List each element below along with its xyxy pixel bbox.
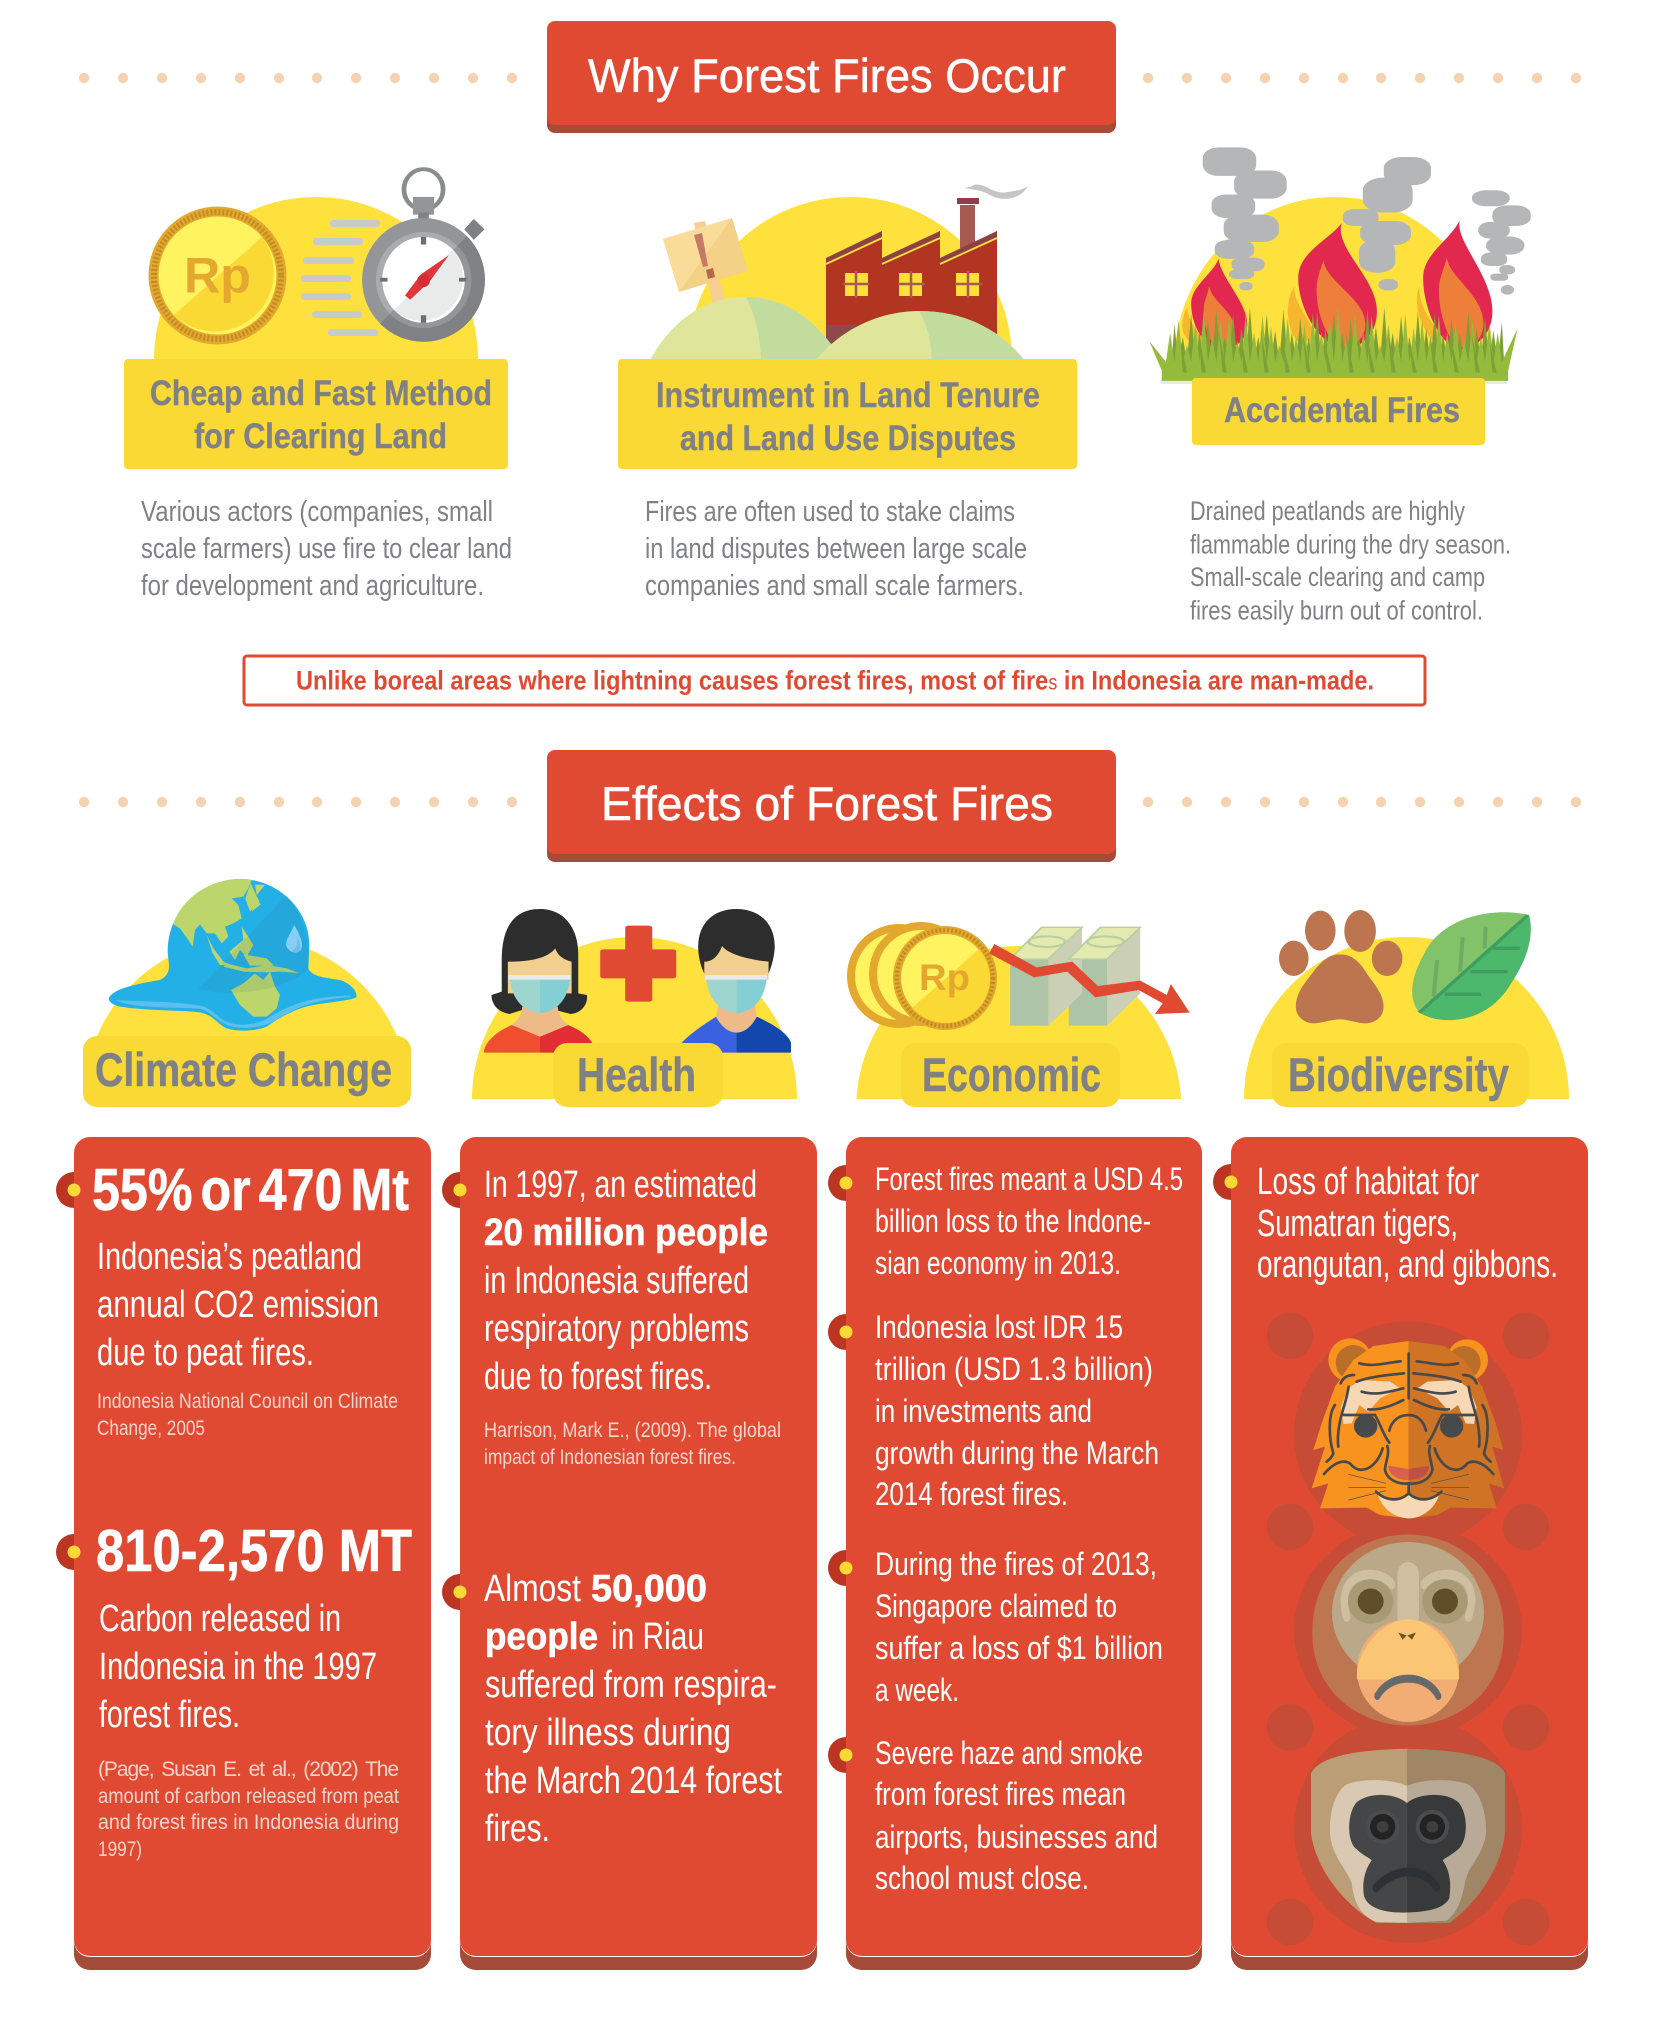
- source note: Harrison: impact of Indonesian forest fires.: [484, 1446, 736, 1469]
- text block: 20 million people: due to forest fires.: [484, 1356, 712, 1398]
- text block: peatland emission: Indonesia’s peatland: [97, 1236, 362, 1278]
- text block: carbon released: Carbon released in: [99, 1598, 341, 1640]
- heading: accidental fires: Accidental Fires: [1224, 391, 1460, 430]
- text block: accidental fires description: flammable during the dry season.: [1190, 530, 1511, 560]
- source note: Harrison: [484, 1419, 781, 1469]
- source note: Page et al.: [98, 1758, 399, 1861]
- heading: instrument in land tenure: Instrument in Land Tenure: [656, 376, 1040, 415]
- icon: paw and leaf: [1279, 910, 1531, 1023]
- text block: haze and smoke closures: Severe haze and smoke: [875, 1735, 1143, 1771]
- text block: Singapore loss: During the fires of 2013,: [875, 1546, 1157, 1582]
- heading: cheap and fast method: [150, 374, 492, 456]
- heading: health: Health: [577, 1048, 696, 1101]
- text block: IDR 15 trillion: [875, 1309, 1159, 1512]
- source note: Page et al.: and forest fires in Indonesia during: [98, 1811, 399, 1834]
- panel: economic facts: [828, 1137, 1202, 1970]
- text block: carbon released: [99, 1598, 377, 1736]
- icon: orangutan face: [1312, 1534, 1504, 1726]
- coin label: Rp: [184, 248, 251, 304]
- text block: IDR 15 trillion: in investments and: [875, 1393, 1092, 1429]
- icon: man with mask: [682, 909, 791, 1053]
- source note: Page et al.: 1997): [98, 1838, 142, 1861]
- icon: orangutan and gibbon faces: [1311, 1534, 1505, 1923]
- text block: Singapore loss: a week.: [875, 1672, 959, 1708]
- heading: instrument in land tenure: [656, 376, 1040, 458]
- section header: Why Forest Fires Occur: [79, 21, 1581, 133]
- text block: cheap and fast description: Various actors (companies, small: [141, 496, 493, 528]
- text block: accidental fires description: Small-scale clearing and camp: [1190, 562, 1485, 592]
- title: Why Forest Fires Occur: Why Forest Fires Occur: [588, 49, 1066, 102]
- text block: IDR 15 trillion: Indonesia lost IDR 15: [875, 1309, 1123, 1345]
- text block: haze and smoke closures: [875, 1735, 1158, 1896]
- text block: land tenure description: companies and small scale farmers.: [645, 570, 1024, 602]
- icon: stopwatch: [362, 169, 485, 342]
- text block: Singapore loss: Singapore claimed to: [875, 1588, 1117, 1624]
- text block: loss of habitat: Sumatran tigers,: [1257, 1203, 1458, 1245]
- panel: health facts: [442, 1137, 817, 1970]
- icon: smoke: [1203, 147, 1531, 295]
- text block: Singapore loss: suffer a loss of $1 billion: [875, 1630, 1163, 1666]
- source note: national council: Indonesia National Council on Climate: [97, 1390, 398, 1413]
- heading: climate change: Climate Change: [95, 1043, 392, 1096]
- arrow: falling trend: [989, 944, 1190, 1014]
- text block: 20 million people: in Indonesia suffered: [484, 1260, 749, 1302]
- text block: IDR 15 trillion: 2014 forest fires.: [875, 1476, 1068, 1512]
- text block: 50,000 people in Riau: tory illness during: [485, 1712, 731, 1754]
- source note: Harrison: Harrison, Mark E., (2009). The global: [484, 1419, 781, 1442]
- text block: 50,000 people in Riau: Almost: [484, 1568, 581, 1610]
- text block: 50,000 people in Riau: fires.: [485, 1808, 550, 1850]
- icon: medical cross: [600, 926, 676, 1002]
- text block: peatland emission: due to peat fires.: [97, 1332, 314, 1374]
- text block: haze and smoke closures: from forest fires mean: [875, 1776, 1126, 1812]
- icon: flames, smoke and grass: [1149, 147, 1531, 384]
- icon: woman with mask: [484, 909, 592, 1053]
- icon: speed lines: [301, 220, 380, 336]
- icon: grass: [1149, 307, 1518, 384]
- heading: cheap and fast method: Cheap and Fast Method: [150, 374, 492, 413]
- text block: 20 million people: 20 million people: [484, 1212, 768, 1254]
- heading: economic: Economic: [922, 1048, 1101, 1101]
- text block: loss of habitat: Loss of habitat for: [1257, 1161, 1479, 1203]
- text block: IDR 15 trillion: trillion (USD 1.3 billion): [875, 1351, 1153, 1387]
- icon: rupiah coin: [148, 206, 286, 344]
- icon: melting globe: [109, 879, 357, 1031]
- text block: IDR 15 trillion: growth during the March: [875, 1435, 1159, 1471]
- icon: gibbon face: [1311, 1749, 1505, 1923]
- text block: 50,000 people in Riau: people: [485, 1616, 598, 1658]
- text block: haze and smoke closures: airports, businesses and: [875, 1819, 1158, 1855]
- panel: cheap and fast method: [124, 169, 512, 602]
- header: biodiversity: [1244, 910, 1569, 1107]
- icon: protest sign: [663, 218, 748, 308]
- text block: 50,000 people in Riau: 50,000: [591, 1568, 707, 1610]
- header: economic: [847, 922, 1190, 1107]
- icon: rupiah coins: [847, 922, 997, 1030]
- text block: carbon released: forest fires.: [99, 1694, 240, 1736]
- text block: land tenure description: in land disputes between large scale: [645, 533, 1027, 565]
- source note: national council: [97, 1390, 398, 1440]
- text block: USD 4.5 billion loss: [875, 1161, 1183, 1281]
- text block: land tenure description: [645, 496, 1027, 602]
- text block: peatland emission: annual CO2 emission: [97, 1284, 379, 1326]
- callout: man-made fires: [244, 656, 1425, 705]
- panel: land tenure disputes: [618, 184, 1077, 602]
- text block: loss of habitat: [1257, 1161, 1558, 1286]
- text block: cheap and fast description: [141, 496, 512, 602]
- source note: Page et al.: (Page, Susan E. et al., (2002) The: [98, 1758, 399, 1781]
- text block: 50,000 people in Riau: the March 2014 forest: [485, 1760, 782, 1802]
- title: Effects of Forest Fires: Effects of Forest Fires: [601, 777, 1053, 830]
- text block: accidental fires description: fires easily burn out of control.: [1190, 596, 1483, 626]
- text block: haze and smoke closures: school must close.: [875, 1860, 1089, 1896]
- icon: leaf: [1412, 912, 1531, 1020]
- coin label: Rp: [919, 957, 970, 998]
- text block: carbon released: Indonesia in the 1997: [99, 1646, 377, 1688]
- callout: man-made fires: Unlike boreal areas where lightning causes forest fires, most of fires in Indonesia are man-made.: [296, 666, 1374, 696]
- text block: cheap and fast description: for development and agriculture.: [141, 570, 484, 602]
- text block: peatland emission: [97, 1236, 379, 1374]
- text block: USD 4.5 billion loss: Forest fires meant a USD 4.5: [875, 1161, 1183, 1197]
- text block: 20 million people: respiratory problems: [484, 1308, 749, 1350]
- text block: 20 million people: [484, 1164, 768, 1398]
- icon: background spots and halos: [1267, 1313, 1549, 1945]
- section header: Effects of Forest Fires: [79, 750, 1581, 862]
- icon: flames: [1182, 217, 1492, 349]
- panel: biodiversity facts: [1213, 1137, 1588, 1970]
- text block: land tenure description: Fires are often used to stake claims: [645, 496, 1015, 528]
- header: health: [472, 909, 797, 1107]
- text block: 20 million people: In 1997, an estimated: [484, 1164, 757, 1206]
- source note: Page et al.: amount of carbon released from peat: [98, 1785, 399, 1808]
- text block: 50,000 people in Riau: [484, 1568, 782, 1850]
- heading: biodiversity: Biodiversity: [1288, 1048, 1509, 1101]
- panel: climate change facts: [56, 1137, 431, 1970]
- stat: 55% or 470 Mt: 55% or 470 Mt: [92, 1157, 409, 1223]
- stat: 810-2,570 MT: 810-2,570 MT: [96, 1518, 412, 1584]
- source note: national council: Change, 2005: [97, 1417, 205, 1440]
- icon: stacks of money: [1010, 927, 1140, 1026]
- text block: accidental fires description: [1190, 496, 1511, 626]
- text block: 50,000 people in Riau: suffered from respira-: [485, 1664, 777, 1706]
- icon: tiger face: [1312, 1338, 1504, 1518]
- icon: people with masks and medical cross: [484, 909, 791, 1053]
- text block: USD 4.5 billion loss: sian economy in 2013.: [875, 1245, 1121, 1281]
- panel: accidental fires: [1149, 147, 1531, 626]
- icon: factory: [826, 184, 1028, 359]
- header: climate change: [83, 879, 411, 1107]
- heading: instrument in land tenure: and Land Use Disputes: [680, 419, 1016, 458]
- text block: accidental fires description: Drained peatlands are highly: [1190, 496, 1465, 526]
- heading: cheap and fast method: for Clearing Land: [194, 417, 447, 456]
- text block: USD 4.5 billion loss: billion loss to the Indone-: [875, 1203, 1151, 1239]
- text block: Singapore loss: [875, 1546, 1163, 1708]
- text block: cheap and fast description: scale farmers) use fire to clear land: [141, 533, 512, 565]
- text block: 50,000 people in Riau: in Riau: [611, 1616, 704, 1658]
- icon: paw: [1279, 910, 1402, 1023]
- icon: hills: [650, 297, 1024, 360]
